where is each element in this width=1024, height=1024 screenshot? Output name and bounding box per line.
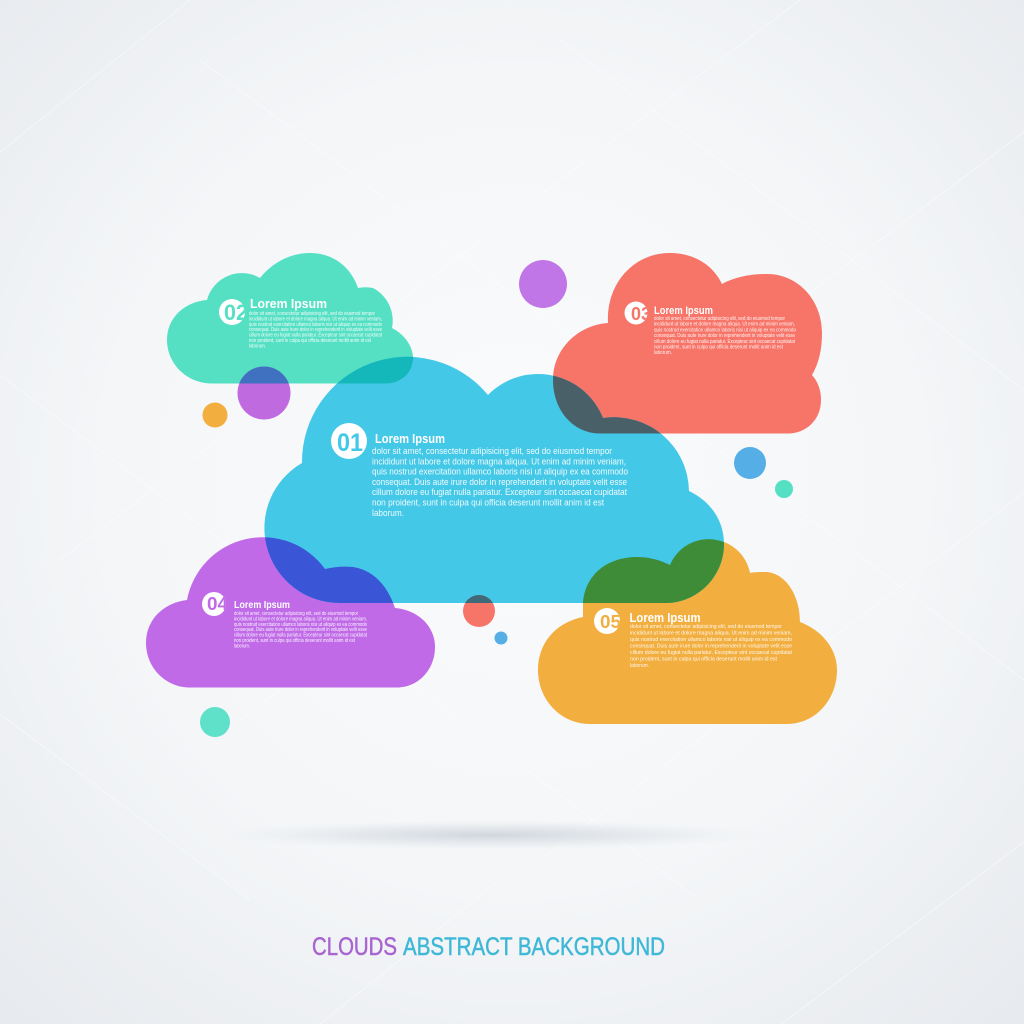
dot: orange [202,402,228,428]
number badge 01: 01 [337,429,363,457]
overlap regions with neighbouring clouds [265,356,724,603]
heading 04: Lorem Ipsum [234,599,290,611]
body text 01: non proident, sunt in culpa qui officia deserunt mollit anim id est [372,498,604,508]
body text 04: cillum dolore eu fugiat nulla pariatur. Excepteur sint occaecat cupidatat [234,633,368,639]
heading 01: Lorem Ipsum [375,431,445,446]
dot: teal right [775,480,793,498]
body text 04: laborum. [234,643,250,649]
body text 05: consequat. Duis aute irure dolor in reprehenderit in voluptate velit esse [630,644,792,650]
number badge 05: 05 [600,612,621,632]
number badge 02 [219,299,245,325]
heading 05: Lorem Ipsum [630,610,700,625]
cloud 05 shape [538,539,837,724]
body text 04: non proident, sunt in culpa qui officia deserunt mollit anim id est [234,638,356,644]
dot: red with blue overlap [463,595,495,627]
body text 03: incididunt ut labore et dolore magna aliqua. Ut enim ad minim veniam, [654,322,795,328]
body text 03: cillum dolore eu fugiat nulla pariatur. Excepteur sint occaecat cupidatat [654,339,796,345]
body text 03: non proident, sunt in culpa qui officia deserunt mollit anim id est [654,344,784,350]
number badge 04: 04 [207,594,228,614]
panel: cloud 03 [553,253,822,434]
number badge 03 [624,302,648,324]
body text 01: dolor sit amet, consectetur adipisicing elit, sed do eiusmod tempor [372,446,612,457]
title: ABSTRACT BACKGROUND [403,933,665,961]
body text 05 [630,624,792,669]
number badge 01 [331,423,367,459]
title: CLOUDS [312,933,397,961]
dot: blue right [734,447,766,479]
dot: teal bottom [200,707,230,737]
body text 02: cillum dolore eu fugiat nulla pariatur. Excepteur sint occaecat cupidatat [249,333,383,339]
body text 04: quis nostrud exercitation ullamco laboris nisi ut aliquip ex ea commodo [234,622,367,628]
body text 01: cillum dolore eu fugiat nulla pariatur. Excepteur sint occaecat cupidatat [372,487,627,498]
heading 03: Lorem Ipsum [654,305,713,317]
dot: purple top [519,260,567,308]
body text 03 [654,316,796,356]
body text 04: consequat. Duis aute irure dolor in reprehenderit in voluptate velit esse [234,627,367,633]
body text 03: quis nostrud exercitation ullamco laboris nisi ut aliquip ex ea commodo [654,327,796,333]
panel: cloud 05 [538,539,837,724]
body text 03: consequat. Duis aute irure dolor in reprehenderit in voluptate velit esse [654,333,795,339]
body text 01: laborum. [372,508,404,519]
body text 02: dolor sit amet, consectetur adipisicing elit, sed do eiusmod tempor [249,311,375,317]
body text 03: laborum. [654,350,672,356]
body text 05: quis nostrud exercitation ullamco laboris nisi ut aliquip ex ea commodo [630,637,792,643]
cloud 01 shape [264,357,724,603]
cloud 04 shape [146,537,435,688]
body text 05: incididunt ut labore et dolore magna aliqua. Ut enim ad minim veniam, [630,630,792,636]
body text 03: dolor sit amet, consectetur adipisicing elit, sed do eiusmod tempor [654,316,785,322]
body text 02: quis nostrud exercitation ullamco laboris nisi ut aliquip ex ea commodo [249,322,382,328]
decorative dots [200,260,793,737]
body text 02: non proident, sunt in culpa qui officia deserunt mollit anim id est [249,338,372,344]
body text 01: incididunt ut labore et dolore magna aliqua. Ut enim ad minim veniam, [372,456,626,467]
number badge 03: 03 [631,304,651,324]
body text 04: incididunt ut labore et dolore magna aliqua. Ut enim ad minim veniam, [234,616,367,622]
body text 02: laborum. [249,343,266,349]
body text 02: consequat. Duis aute irure dolor in reprehenderit in voluptate velit esse [249,327,382,333]
body text 01 [372,446,628,519]
panel: cloud 01 [264,356,724,603]
body text 04: dolor sit amet, consectetur adipisicing elit, sed do eiusmod tempor [234,611,358,617]
body text 02: incididunt ut labore et dolore magna aliqua. Ut enim ad minim veniam, [249,316,382,322]
panel: cloud 02 [167,253,413,384]
body text 01: consequat. Duis aute irure dolor in reprehenderit in voluptate velit esse [372,477,627,488]
body text 05: laborum. [630,663,649,669]
cloud 02 shape [167,253,413,384]
floor shadow [210,820,770,850]
number badge 04 [202,592,228,616]
body text 05: non proident, sunt in culpa qui officia deserunt mollit anim id est [630,656,777,662]
number badge 05 [594,608,621,634]
body text 02 [249,311,383,349]
body text 05: cillum dolore eu fugiat nulla pariatur. Excepteur sint occaecat cupidatat [630,650,792,656]
cloud 03 shape [553,253,822,434]
body text 01: quis nostrud exercitation ullamco laboris nisi ut aliquip ex ea commodo [372,467,628,478]
number badge 02: 02 [224,300,248,325]
dot: purple with teal overlap [238,366,290,420]
dot: small blue [494,632,508,644]
body text 05: dolor sit amet, consectetur adipisicing elit, sed do eiusmod tempor [630,624,782,630]
heading 02: Lorem Ipsum [250,297,327,311]
title [312,933,665,961]
body text 04 [234,611,368,649]
panel: cloud 04 [146,537,435,688]
